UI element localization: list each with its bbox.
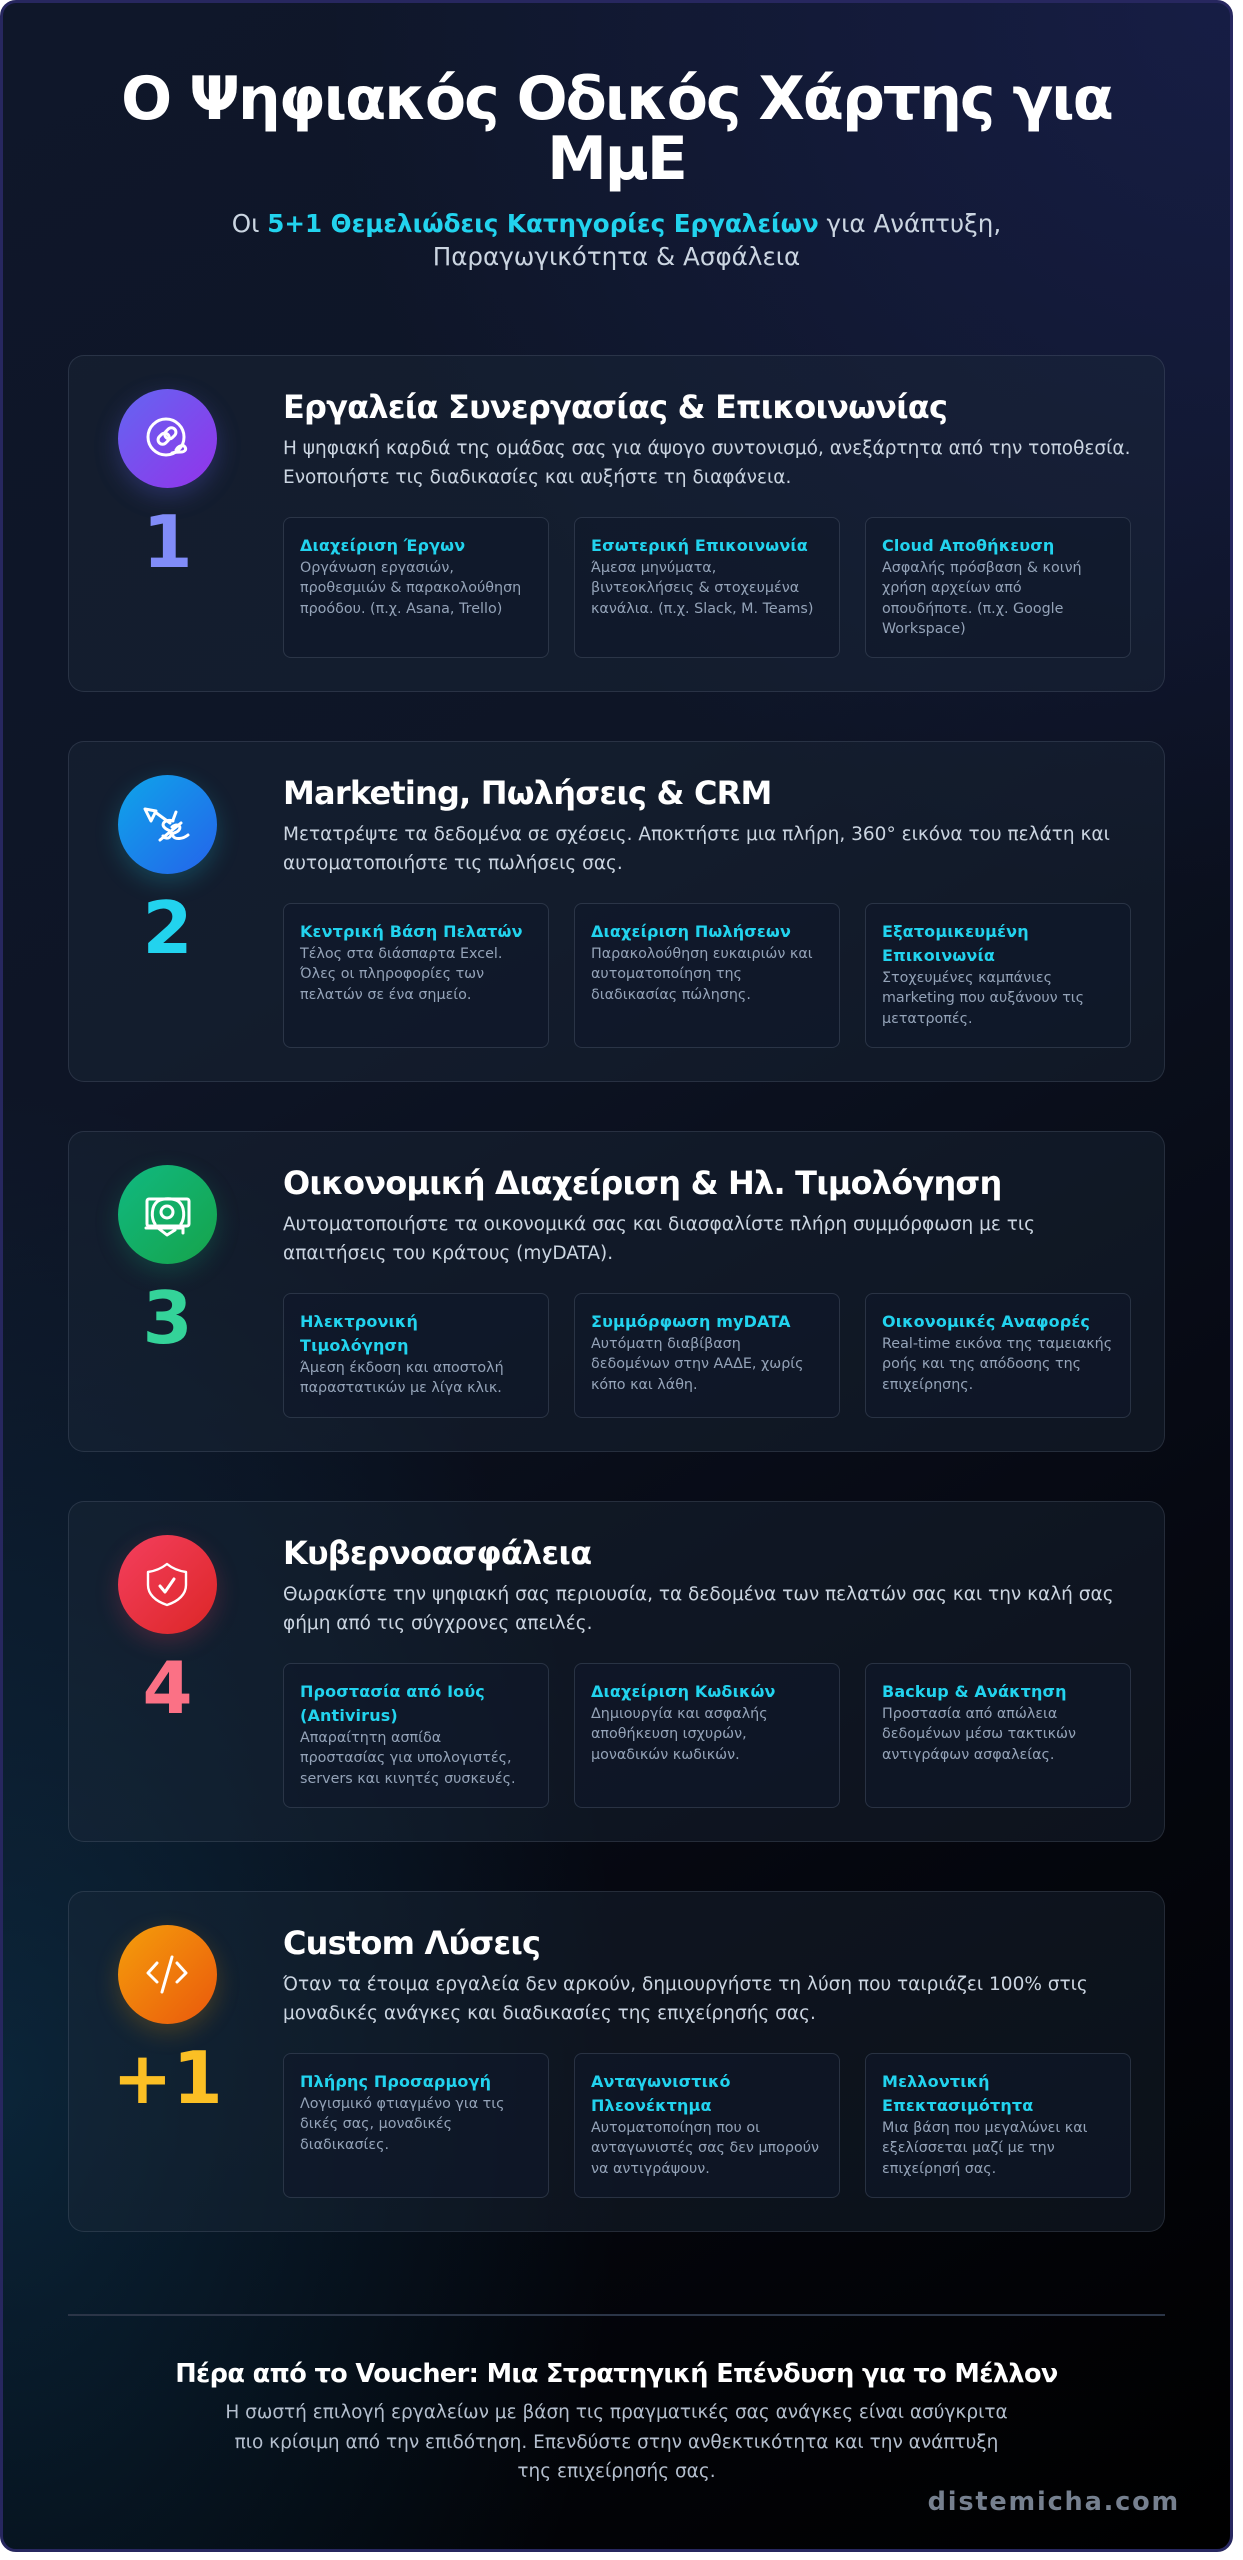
card: financial reports — [865, 1293, 1131, 1418]
card: internal communication: κανάλια. (π.χ. Slack, M. Teams) — [591, 601, 813, 617]
card: password management: Δημιουργία και ασφαλής — [591, 1706, 768, 1722]
description: μοναδικές ανάγκες και διαδικασίες της επιχείρησής σας. — [283, 2003, 816, 2024]
card: future scalability — [865, 2053, 1131, 2198]
card: full customisation: δικές σας, μοναδικές — [300, 2116, 452, 2132]
card: antivirus: Προστασία από Ιούς — [300, 1682, 485, 1701]
footer heading: Πέρα από το Voucher: Μια Στρατηγική Επένδυση για το Μέλλον — [175, 2359, 1058, 2389]
card: financial reports: επιχείρησης. — [882, 1377, 973, 1393]
card: cloud storage: οπουδήποτε. (π.χ. Google — [882, 601, 1063, 617]
card: competitive advantage: Ανταγωνιστικό — [591, 2072, 731, 2091]
description: Ενοποιήστε τις διαδικασίες και αυξήστε τη διαφάνεια. — [283, 467, 791, 488]
card: e-invoicing: Τιμολόγηση — [300, 1336, 409, 1355]
card: financial reports: Οικονομικές Αναφορές — [882, 1312, 1090, 1331]
number 2: 2 — [142, 886, 193, 970]
card: antivirus: (Antivirus) — [300, 1706, 398, 1725]
number 4: 4 — [142, 1646, 193, 1730]
card: password management: Διαχείριση Κωδικών — [591, 1682, 776, 1701]
number 1: 1 — [142, 500, 193, 584]
subtitle — [232, 209, 1001, 271]
card: internal communication: Άμεσα μηνύματα, — [591, 560, 716, 576]
card: e-invoicing: παραστατικών με λίγα κλικ. — [300, 1380, 502, 1396]
card: central customer base: Τέλος στα διάσπαρτα Excel. — [300, 946, 502, 962]
card: internal communication: Εσωτερική Επικοινωνία — [591, 536, 808, 555]
heading: Marketing, Πωλήσεις & CRM — [283, 774, 772, 812]
card: internal communication: βιντεοκλήσεις & στοχευμένα — [591, 580, 799, 596]
card: personalised communication: Επικοινωνία — [882, 946, 995, 965]
card: future scalability: Μια βάση που μεγαλώνει και — [882, 2120, 1087, 2136]
card: backup and recovery: δεδομένων μέσω τακτικών — [882, 1726, 1076, 1742]
card: sales management: αυτοματοποίηση της — [591, 966, 742, 982]
description: Αυτοματοποιήστε τα οικονομικά σας και διασφαλίστε πλήρη συμμόρφωση με τις — [283, 1214, 1035, 1235]
card: full customisation: διαδικασίες. — [300, 2137, 389, 2153]
card: antivirus — [283, 1663, 549, 1808]
card: personalised communication: Στοχευμένες καμπάνιες — [882, 970, 1052, 986]
card: password management: μοναδικών κωδικών. — [591, 1747, 740, 1763]
footer text: πιο κρίσιμη από την επιδότηση. Επενδύστε στην ανθεκτικότητα και την ανάπτυξη — [235, 2432, 998, 2452]
subtitle: Οι 5+1 Θεμελιώδεις Κατηγορίες Εργαλείων για Ανάπτυξη, — [232, 209, 1001, 238]
description — [283, 824, 1110, 874]
card: myDATA compliance: Συμμόρφωση myDATA — [591, 1312, 791, 1331]
card: future scalability: Επεκτασιμότητα — [882, 2096, 1033, 2115]
card: antivirus: servers και κινητές συσκευές. — [300, 1771, 516, 1787]
card: competitive advantage — [574, 2053, 840, 2198]
footer text: Η σωστή επιλογή εργαλείων με βάση τις πραγματικές σας ανάγκες είναι ασύγκριτα — [225, 2402, 1008, 2423]
heading: Εργαλεία Συνεργασίας & Επικοινωνίας — [283, 388, 947, 426]
card: e-invoicing: Ηλεκτρονική — [300, 1312, 418, 1331]
card: future scalability: Μελλοντική — [882, 2072, 990, 2091]
panel: financial management and e-invoicing — [68, 1131, 1165, 1452]
title: ΜμΕ — [547, 124, 686, 194]
card: password management: αποθήκευση ισχυρών, — [591, 1726, 747, 1742]
panel: marketing, sales and CRM — [68, 741, 1165, 1082]
card: sales management: διαδικασίας πώλησης. — [591, 987, 751, 1003]
description: Όταν τα έτοιμα εργαλεία δεν αρκούν, δημιουργήστε τη λύση που ταιριάζει 100% στις — [283, 1974, 1088, 1995]
card: competitive advantage: ανταγωνιστές σας δεν μπορούν — [591, 2140, 819, 2156]
heading: Κυβερνοασφάλεια — [283, 1534, 591, 1572]
card: myDATA compliance: δεδομένων στην ΑΑΔΕ, χωρίς — [591, 1356, 804, 1372]
card: competitive advantage: να αντιγράψουν. — [591, 2161, 710, 2177]
card: backup and recovery: Backup & Ανάκτηση — [882, 1682, 1067, 1701]
card: central customer base: Κεντρική Βάση Πελατών — [300, 922, 523, 941]
card: personalised communication — [865, 903, 1131, 1048]
card: myDATA compliance: κόπο και λάθη. — [591, 1377, 698, 1393]
description — [283, 438, 1130, 488]
panel: custom solutions — [68, 1891, 1165, 2232]
description — [283, 1584, 1114, 1634]
card: full customisation: Λογισμικό φτιαγμένο για τις — [300, 2096, 505, 2112]
card: project management: προθεσμιών & παρακολούθηση — [300, 580, 521, 596]
card: cloud storage: Cloud Αποθήκευση — [882, 536, 1054, 555]
card: project management: Διαχείριση Έργων — [300, 536, 465, 555]
description — [283, 1214, 1035, 1264]
subtitle: Παραγωγικότητα & Ασφάλεια — [433, 242, 800, 271]
card: myDATA compliance — [574, 1293, 840, 1418]
card: personalised communication: Εξατομικευμένη — [882, 922, 1029, 941]
card: future scalability: επιχείρησή σας. — [882, 2161, 996, 2177]
description: φήμη από τις σύγχρονες απειλές. — [283, 1613, 592, 1634]
description — [282, 1974, 1088, 2024]
panel: cybersecurity — [68, 1501, 1165, 1842]
footer text — [225, 2402, 1008, 2482]
card: password management — [574, 1663, 840, 1808]
heading: Custom Λύσεις — [283, 1924, 540, 1962]
card: project management — [283, 517, 549, 658]
card: project management: Οργάνωση εργασιών, — [300, 560, 454, 576]
card: central customer base — [283, 903, 549, 1048]
title: Ο Ψηφιακός Οδικός Χάρτης για — [121, 64, 1112, 134]
description: Θωρακίστε την ψηφιακή σας περιουσία, τα δεδομένα των πελατών σας και την καλή σας — [283, 1584, 1114, 1605]
card: competitive advantage: Πλεονέκτημα — [591, 2096, 712, 2115]
watermark: distemicha.com — [928, 2487, 1180, 2517]
card: backup and recovery — [865, 1663, 1131, 1808]
card: backup and recovery: Προστασία από απώλεια — [882, 1706, 1057, 1722]
card: cloud storage — [865, 517, 1131, 658]
card: cloud storage: Ασφαλής πρόσβαση & κοινή — [882, 560, 1082, 576]
card: antivirus: Απαραίτητη ασπίδα — [300, 1730, 441, 1746]
card: competitive advantage: Αυτοματοποίηση που οι — [591, 2120, 760, 2136]
card: backup and recovery: αντιγράφων ασφαλείας. — [882, 1747, 1054, 1763]
icon: finance — [118, 1165, 217, 1264]
icon: marketing — [118, 775, 217, 874]
card: e-invoicing: Άμεση έκδοση και αποστολή — [300, 1360, 504, 1376]
description: Μετατρέψτε τα δεδομένα σε σχέσεις. Αποκτήστε μια πλήρη, 360° εικόνα του πελάτη και — [283, 824, 1110, 845]
panel: collaboration and communication tools — [68, 355, 1165, 692]
card: internal communication — [574, 517, 840, 658]
card: full customisation — [283, 2053, 549, 2198]
card: antivirus: προστασίας για υπολογιστές, — [300, 1750, 512, 1766]
description: Η ψηφιακή καρδιά της ομάδας σας για άψογο συντονισμό, ανεξάρτητα από την τοποθεσία. — [283, 438, 1130, 459]
card: sales management: Διαχείριση Πωλήσεων — [591, 922, 791, 941]
card: financial reports: ροής και της απόδοσης της — [882, 1356, 1081, 1372]
description: απαιτήσεις του κράτους (myDATA). — [283, 1243, 613, 1264]
number +1: +1 — [112, 2036, 223, 2120]
card: future scalability: εξελίσσεται μαζί με την — [882, 2140, 1055, 2156]
card: central customer base: Όλες οι πληροφορίες των — [300, 966, 484, 982]
card: personalised communication: marketing που αυξάνουν τις — [882, 990, 1084, 1006]
icon: code — [118, 1925, 217, 2024]
card: myDATA compliance: Αυτόματη διαβίβαση — [591, 1336, 741, 1352]
number 3: 3 — [142, 1276, 193, 1360]
title — [121, 64, 1112, 194]
icon: shield — [118, 1535, 217, 1634]
card: sales management — [574, 903, 840, 1048]
card: e-invoicing — [283, 1293, 549, 1418]
footer text: της επιχείρησής σας. — [517, 2461, 716, 2482]
card: financial reports: Real-time εικόνα της ταμειακής — [882, 1336, 1112, 1352]
card: full customisation: Πλήρης Προσαρμογή — [300, 2072, 491, 2091]
heading: Οικονομική Διαχείριση & Ηλ. Τιμολόγηση — [283, 1164, 1002, 1202]
card: cloud storage: χρήση αρχείων από — [882, 580, 1022, 596]
card: cloud storage: Workspace) — [882, 621, 966, 637]
card: sales management: Παρακολούθηση ευκαιριών και — [591, 946, 813, 962]
card: project management: προόδου. (π.χ. Asana, Trello) — [300, 601, 502, 617]
card: central customer base: πελατών σε ένα σημείο. — [300, 987, 471, 1003]
card: personalised communication: μετατροπές. — [882, 1011, 973, 1027]
icon: collaboration — [118, 389, 217, 488]
description: αυτοματοποιήστε τις πωλήσεις σας. — [283, 853, 623, 874]
